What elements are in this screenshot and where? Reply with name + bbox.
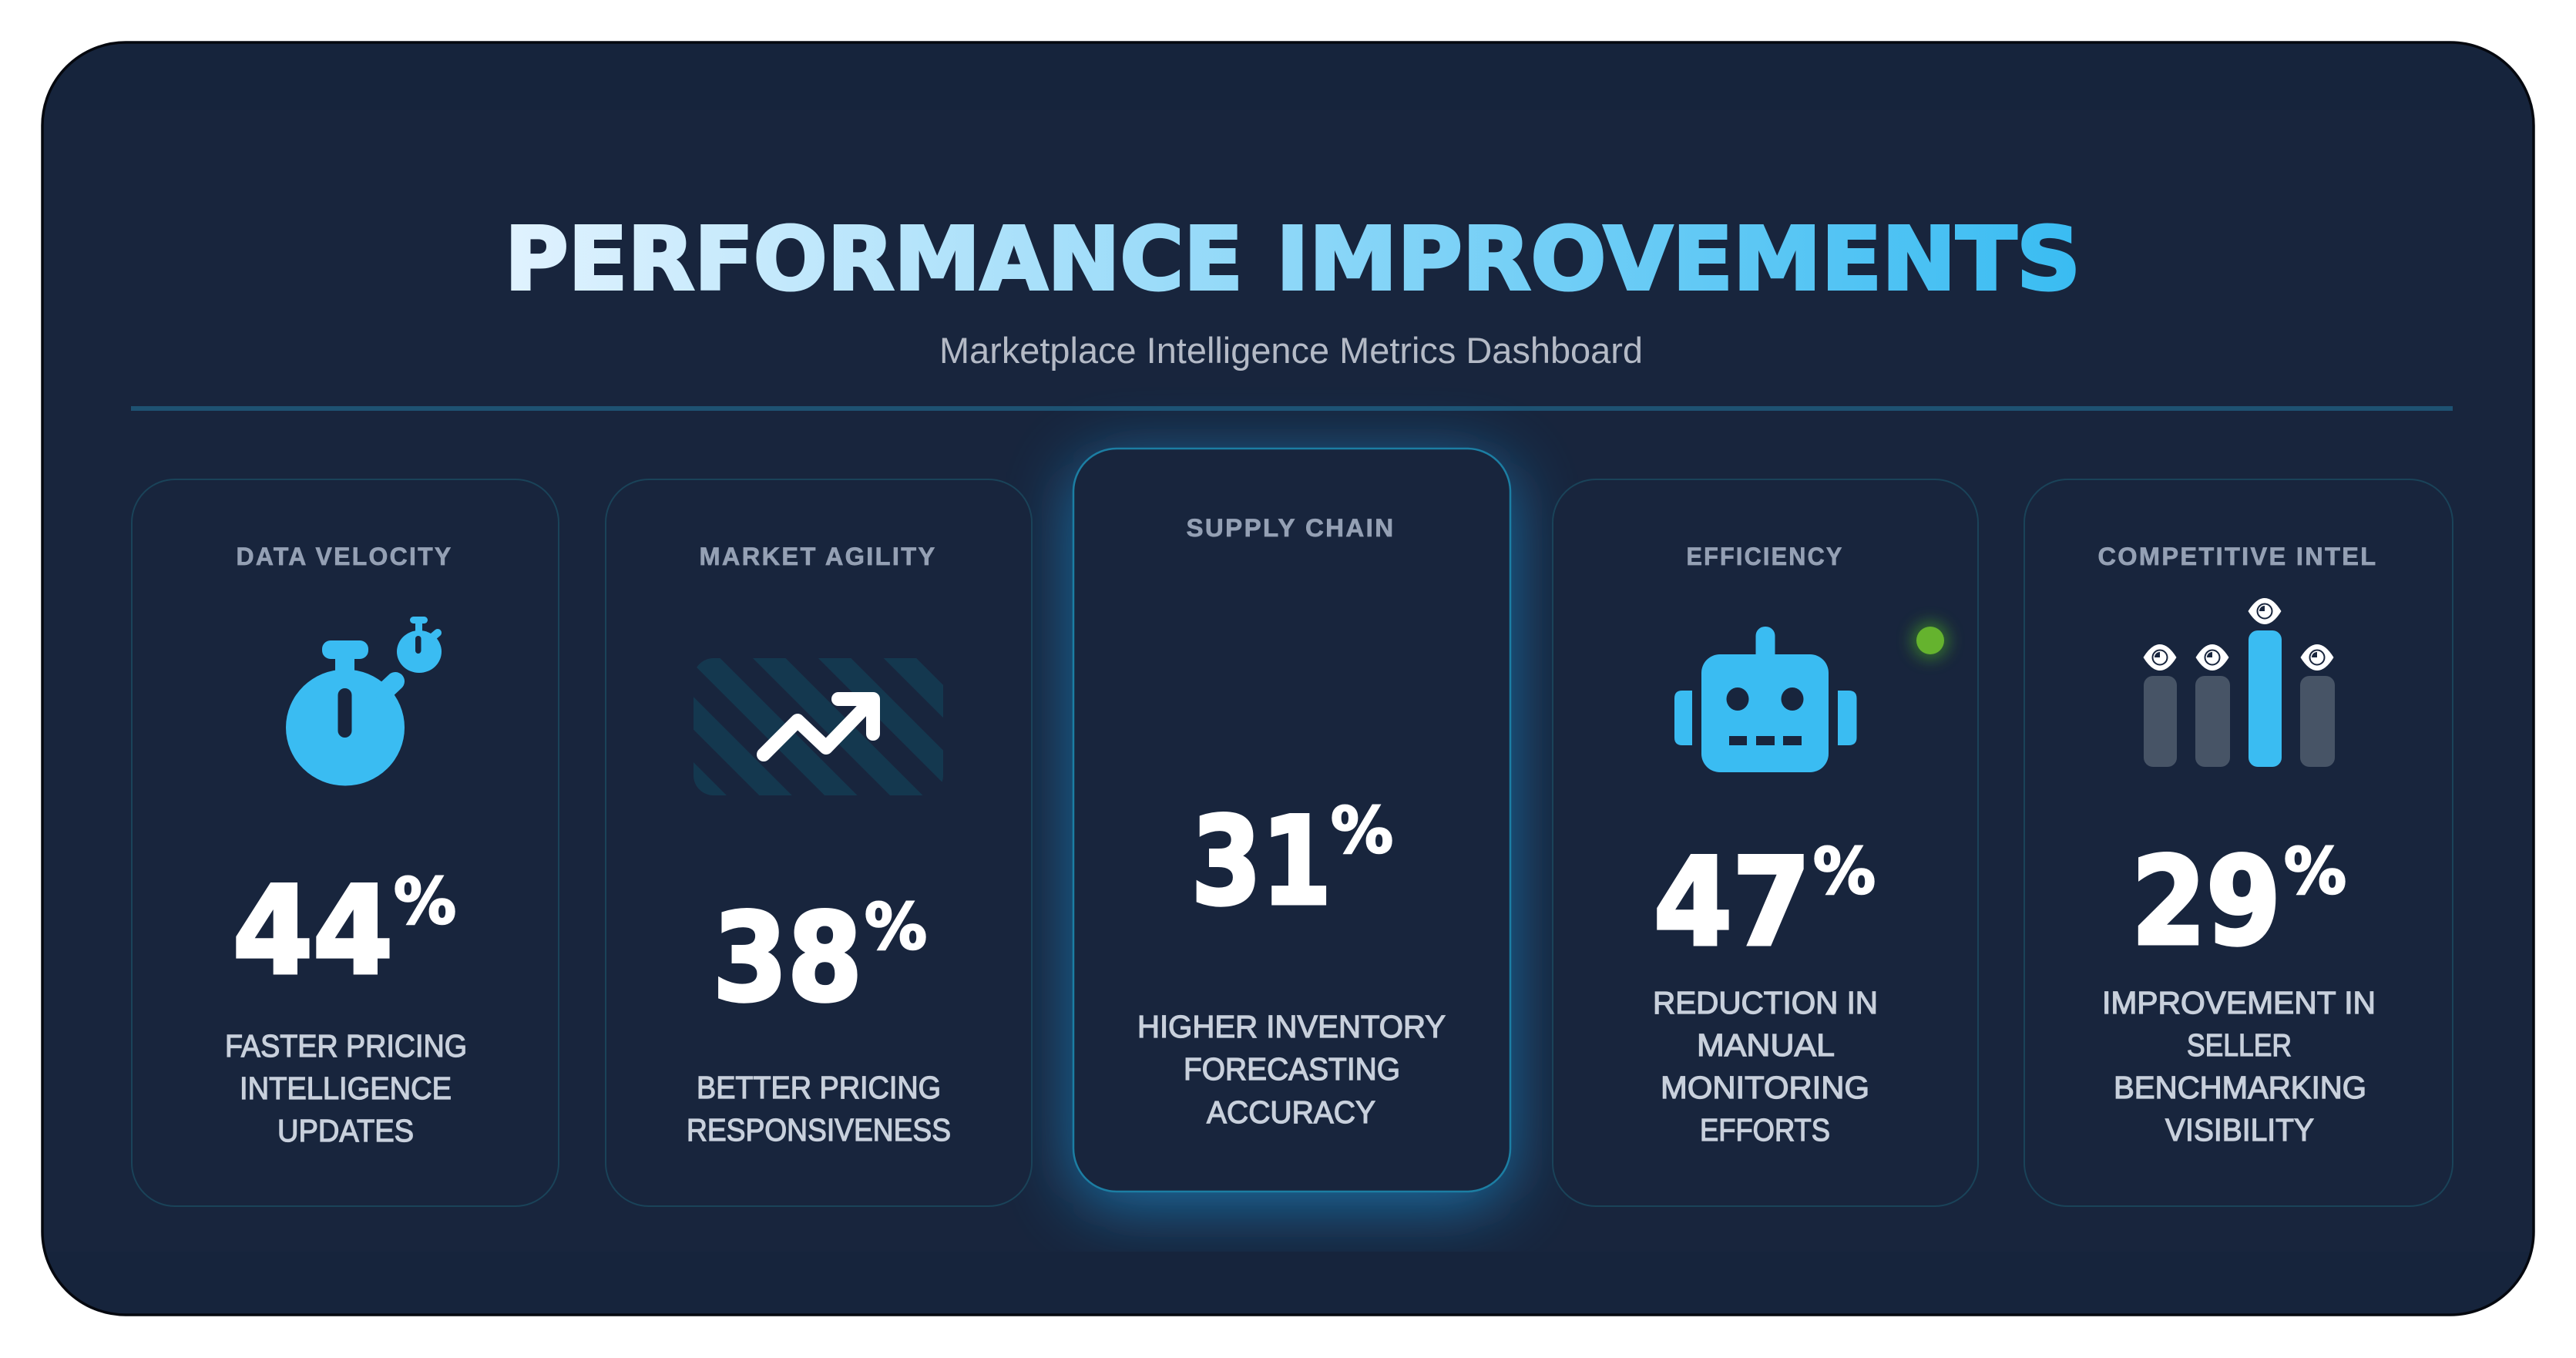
description: INTELLIGENCE	[240, 1071, 452, 1106]
label: competitive intel: COMPETITIVE INTEL	[2097, 543, 2378, 570]
title: PERFORMANCE	[505, 210, 1243, 310]
description	[2102, 985, 2376, 1148]
description	[225, 1028, 467, 1148]
panel: competitive intel	[2024, 479, 2453, 1206]
description: BENCHMARKING	[2114, 1070, 2366, 1105]
value: 44 percent: %	[394, 866, 456, 939]
label: efficiency: EFFICIENCY	[1686, 543, 1843, 570]
panel: data velocity	[132, 479, 559, 1206]
label: supply chain: SUPPLY CHAIN	[1187, 514, 1395, 542]
icon: stopwatches	[286, 617, 442, 786]
description	[1653, 985, 1878, 1148]
description: REDUCTION IN	[1653, 985, 1878, 1020]
value: 31 percent: 31	[1191, 792, 1332, 933]
panel: efficiency	[1553, 479, 1978, 1206]
description: HIGHER INVENTORY	[1137, 1009, 1446, 1044]
description	[1137, 1009, 1446, 1130]
title	[505, 210, 2081, 310]
highlight glow behind supply chain card	[1073, 461, 1510, 1205]
subtitle: Marketplace Intelligence Metrics Dashboard	[939, 330, 1643, 371]
value: 29 percent: %	[2284, 835, 2346, 909]
value: 38 percent: 38	[713, 888, 862, 1029]
description: ACCURACY	[1207, 1094, 1375, 1130]
label: data velocity: DATA VELOCITY	[236, 543, 453, 570]
description: UPDATES	[277, 1113, 414, 1148]
icon: robot head	[1674, 627, 1857, 772]
description: RESPONSIVENESS	[687, 1112, 951, 1148]
value: 31 percent: %	[1331, 795, 1393, 868]
panel: supply chain (highlighted)	[1073, 449, 1510, 1192]
icon: bars with eyes	[2144, 598, 2335, 767]
description: MONITORING	[1661, 1070, 1869, 1105]
value: 29 percent: 29	[2131, 832, 2281, 973]
panel: market agility	[606, 479, 1032, 1206]
value: 38 percent: %	[865, 891, 927, 964]
icon: trending arrow on striped tile	[694, 658, 943, 795]
description	[687, 1070, 951, 1148]
description: MANUAL	[1697, 1027, 1835, 1063]
description: VISIBILITY	[2165, 1112, 2314, 1148]
description: SELLER	[2187, 1027, 2292, 1063]
description: BETTER PRICING	[697, 1070, 941, 1105]
value: 47 percent: 47	[1654, 832, 1811, 973]
status dot	[1912, 622, 1949, 659]
description: FORECASTING	[1184, 1051, 1400, 1087]
description: IMPROVEMENT IN	[2102, 985, 2376, 1020]
value: 44 percent: 44	[233, 861, 393, 1002]
description: EFFORTS	[1700, 1112, 1830, 1148]
description: FASTER PRICING	[225, 1028, 467, 1064]
title: IMPROVEMENTS	[1276, 210, 2081, 310]
label: market agility: MARKET AGILITY	[700, 543, 937, 570]
value: 47 percent: %	[1813, 835, 1876, 909]
